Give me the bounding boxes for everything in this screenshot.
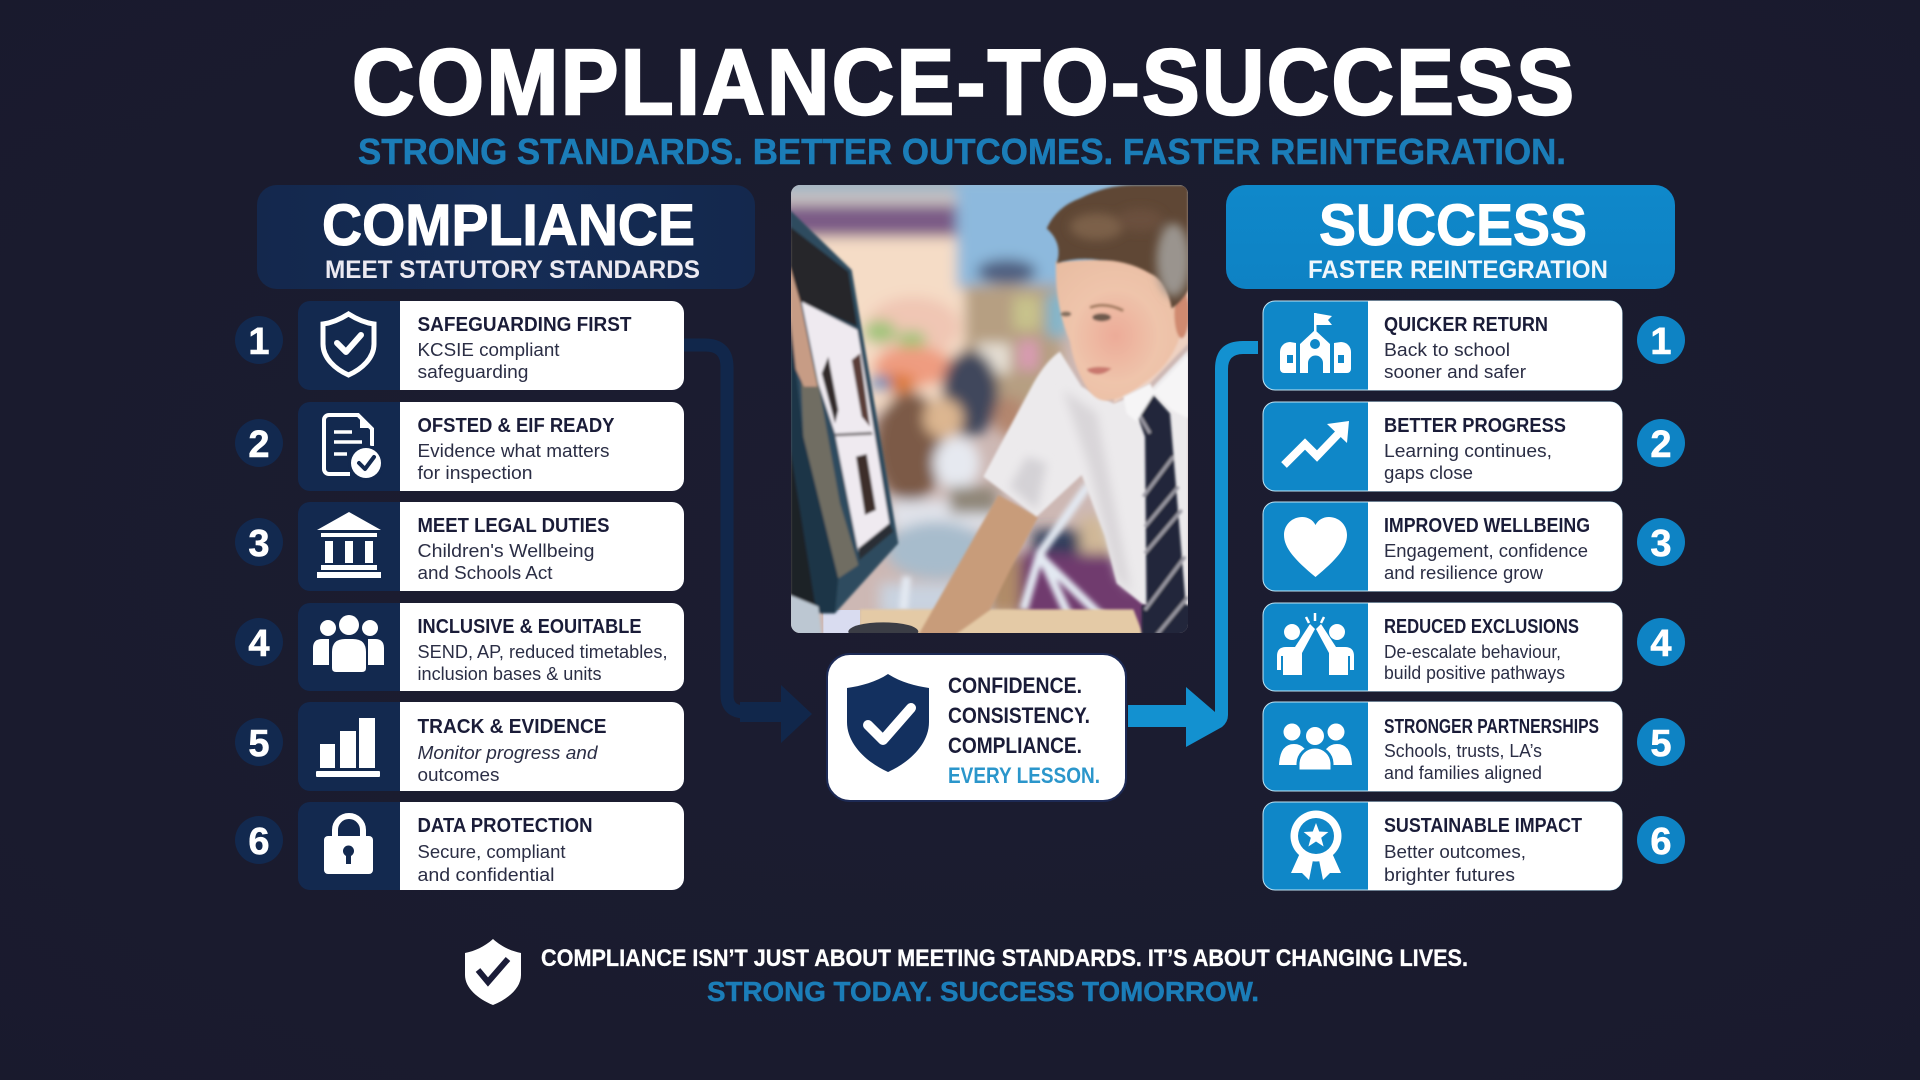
callout: confidence, consistency, compliance: CONFIDENCE.: [948, 673, 1082, 698]
success row 6: sustainable impact: brighter futures: [1384, 865, 1515, 885]
compliance row 5: track and evidence: Monitor progress and: [418, 743, 599, 763]
compliance row 2: ofsted and eif ready: Evidence what matters: [418, 441, 610, 461]
icon: institution: [317, 512, 381, 578]
success row 5: stronger partnerships: Schools, trusts, LA’s: [1384, 741, 1542, 761]
icon: partners group: [1279, 724, 1352, 771]
icon: shield check: [323, 314, 374, 375]
compliance row 2: ofsted and eif ready: for inspection: [418, 463, 532, 483]
monitor: [790, 210, 898, 635]
success row 3: improved wellbeing: Engagement, confidence: [1384, 541, 1588, 561]
success row 3: improved wellbeing: [1263, 502, 1685, 591]
compliance row 4: inclusive and equitable: 4: [248, 623, 270, 665]
icon: padlock: [324, 816, 373, 874]
compliance row 4: inclusive and equitable: SEND, AP, reduced timetables,: [418, 642, 668, 662]
panel: compliance column: [235, 185, 755, 890]
success row 4: reduced exclusions: [1263, 603, 1685, 691]
arrow: compliance to centre: [684, 345, 812, 743]
collar and tie: [1123, 355, 1192, 637]
footer statement: COMPLIANCE ISN’T JUST ABOUT MEETING STANDARDS. IT’S ABOUT CHANGING LIVES.: [541, 945, 1468, 972]
compliance row 1: safeguarding first: SAFEGUARDING FIRST: [418, 314, 632, 336]
icon: rising arrow: [1284, 421, 1349, 465]
success row 5: stronger partnerships: [1263, 702, 1685, 791]
compliance row 5: track and evidence: TRACK & EVIDENCE: [418, 716, 606, 738]
success row 1: quicker return: sooner and safer: [1384, 362, 1526, 382]
footer tagline: STRONG TODAY. SUCCESS TOMORROW.: [707, 976, 1259, 1007]
success row 3: improved wellbeing: and resilience grow: [1384, 563, 1544, 583]
compliance row 4: inclusive and equitable: inclusion bases & units: [418, 664, 602, 684]
success row 4: reduced exclusions: 4: [1650, 623, 1672, 665]
icon: footer shield: [465, 939, 521, 1005]
icon: school: [1280, 313, 1351, 373]
compliance row 3: meet legal duties: MEET LEGAL DUTIES: [418, 515, 610, 537]
icon: bar chart: [316, 718, 380, 777]
success row 1: quicker return: Back to school: [1384, 340, 1510, 360]
arm and shirt: [918, 350, 1188, 635]
compliance row 6: data protection: [235, 802, 684, 890]
callout: confidence, consistency, compliance: CONSISTENCY.: [948, 703, 1090, 728]
success row 2: better progress: BETTER PROGRESS: [1384, 415, 1566, 437]
subtitle: STRONG STANDARDS. BETTER OUTCOMES. FASTER REINTEGRATION.: [358, 131, 1566, 172]
success row 2: better progress: 2: [1650, 424, 1672, 466]
compliance row 1: safeguarding first: safeguarding: [418, 362, 528, 382]
compliance row 1: safeguarding first: [235, 301, 684, 390]
blurred classroom background: [780, 177, 1200, 647]
success row 2: better progress: Learning continues,: [1384, 441, 1552, 461]
compliance row 6: data protection: DATA PROTECTION: [418, 815, 592, 837]
success row 4: reduced exclusions: REDUCED EXCLUSIONS: [1384, 616, 1579, 638]
hair highlights: [1070, 208, 1190, 297]
success row 1: quicker return: [1263, 301, 1685, 390]
panel: success column: [1226, 185, 1685, 890]
compliance row 6: data protection: and confidential: [418, 865, 554, 885]
success row 6: sustainable impact: [1263, 802, 1685, 890]
title: COMPLIANCE-TO-SUCCESS: [352, 31, 1574, 135]
icon: group of people: [313, 615, 384, 672]
icon: award rosette: [1290, 810, 1342, 880]
compliance row 5: track and evidence: outcomes: [418, 765, 500, 785]
arrow: centre to success: [1128, 341, 1258, 747]
success row 1: quicker return: QUICKER RETURN: [1384, 314, 1548, 336]
compliance header: COMPLIANCE: [322, 193, 695, 258]
success row 2: better progress: [1263, 402, 1685, 491]
compliance row 4: inclusive and equitable: INCLUSIVE & EOUITABLE: [418, 616, 642, 638]
compliance row 6: data protection: Secure, compliant: [418, 842, 566, 862]
icon: callout shield: [847, 674, 929, 772]
callout: confidence, consistency, compliance: EVERY LESSON.: [948, 763, 1100, 788]
hair: [1047, 185, 1188, 308]
compliance row 2: ofsted and eif ready: [235, 402, 684, 491]
compliance row 5: track and evidence: 5: [248, 723, 270, 765]
compliance row 1: safeguarding first: 1: [248, 321, 270, 363]
face: [1056, 257, 1189, 403]
compliance row 2: ofsted and eif ready: 2: [248, 424, 270, 466]
compliance row 2: ofsted and eif ready: OFSTED & EIF READY: [418, 415, 615, 437]
photo: boy at a computer in a classroom: [780, 177, 1200, 647]
success row 2: better progress: gaps close: [1384, 463, 1473, 483]
success row 6: sustainable impact: 6: [1650, 821, 1672, 863]
compliance row 4: inclusive and equitable: [235, 603, 684, 691]
desk: [860, 609, 1143, 635]
success row 3: improved wellbeing: 3: [1650, 523, 1672, 565]
compliance row 6: data protection: 6: [248, 821, 270, 863]
compliance row 3: meet legal duties: [235, 502, 684, 591]
success row 4: reduced exclusions: build positive pathways: [1384, 663, 1565, 683]
compliance header: MEET STATUTORY STANDARDS: [325, 256, 700, 284]
shirt shading: [1010, 390, 1132, 593]
success row 5: stronger partnerships: STRONGER PARTNERSHIPS: [1384, 716, 1599, 738]
success row 4: reduced exclusions: De-escalate behaviour,: [1384, 642, 1561, 662]
callout: confidence, consistency, compliance: COMPLIANCE.: [948, 733, 1082, 758]
success header: SUCCESS: [1319, 193, 1587, 258]
icon: document check: [324, 415, 384, 481]
compliance row 3: meet legal duties: and Schools Act: [418, 563, 552, 583]
success row 1: quicker return: 1: [1650, 321, 1672, 363]
icon: heart: [1284, 517, 1347, 577]
compliance row 3: meet legal duties: 3: [248, 523, 270, 565]
success row 6: sustainable impact: SUSTAINABLE IMPACT: [1384, 815, 1582, 837]
compliance header: [257, 185, 755, 289]
compliance row 1: safeguarding first: KCSIE compliant: [418, 340, 560, 360]
chair legs: [903, 485, 1108, 623]
success header: FASTER REINTEGRATION: [1308, 256, 1608, 284]
success header: [1226, 185, 1675, 289]
icon: high five: [1277, 613, 1354, 675]
compliance row 3: meet legal duties: Children's Wellbeing: [418, 541, 594, 561]
success row 5: stronger partnerships: 5: [1650, 723, 1672, 765]
success row 3: improved wellbeing: IMPROVED WELLBEING: [1384, 515, 1590, 537]
compliance row 5: track and evidence: [235, 702, 684, 791]
callout: confidence, consistency, compliance: [827, 654, 1126, 801]
success row 5: stronger partnerships: and families aligned: [1384, 763, 1542, 783]
success row 6: sustainable impact: Better outcomes,: [1384, 842, 1526, 862]
